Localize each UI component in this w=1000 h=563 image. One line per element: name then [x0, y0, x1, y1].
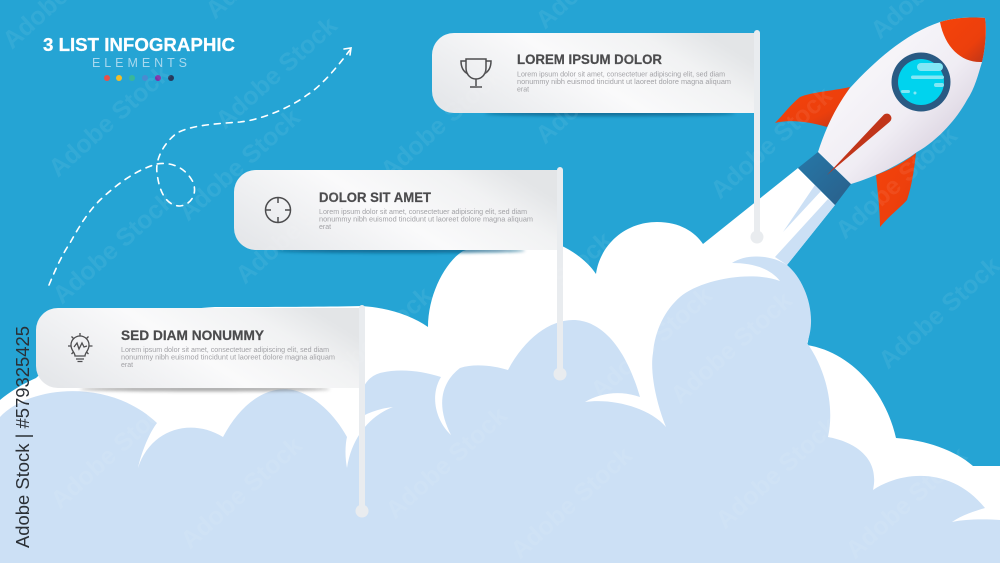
heading: SED DIAM NONUMMY	[121, 328, 264, 343]
light blue smoke cloud	[0, 256, 1000, 563]
body text: Lorem ipsum dolor sit amet, consectetuer adipiscing elit, sed diam	[517, 72, 725, 78]
watermark: Adobe Stock	[505, 441, 638, 563]
body text: erat	[517, 86, 529, 94]
body text: Lorem ipsum dolor sit amet, consectetuer adipiscing elit, sed diam	[121, 347, 329, 354]
panel: lorem ipsum dolor	[432, 33, 757, 116]
watermark: Adobe Stock	[230, 166, 363, 289]
white smoke cloud	[0, 168, 1000, 563]
body text	[319, 209, 533, 231]
body text: Lorem ipsum dolor sit amet, consectetuer adipiscing elit, sed diam	[319, 209, 527, 216]
watermark: Adobe Stock	[485, 226, 618, 349]
watermark: Adobe Stock	[305, 281, 438, 404]
watermark: Adobe Stock	[43, 59, 176, 182]
body text: erat	[121, 362, 133, 369]
watermark: Adobe Stock	[375, 61, 508, 184]
heading: DOLOR SIT AMET	[319, 190, 432, 205]
engine	[798, 152, 851, 205]
panel: sed diam nonummy	[36, 308, 362, 392]
watermark: Adobe Stock	[173, 103, 306, 226]
watermark: Adobe Stock	[830, 121, 963, 244]
icon: light bulb	[68, 333, 92, 362]
fuselage stripe	[827, 114, 891, 175]
watermark: Adobe Stock	[710, 411, 843, 534]
right fin	[876, 153, 916, 227]
watermark: Adobe Stock	[380, 401, 513, 524]
body text	[121, 347, 335, 369]
left fin	[775, 87, 850, 127]
title	[43, 35, 235, 70]
body text: nonummy nibh euismod tincidunt ut laoreet dolore magna aliquam	[517, 79, 731, 86]
watermark: Adobe Stock	[665, 286, 798, 409]
watermark: Adobe Stock	[210, 11, 343, 134]
stock id label: Adobe Stock | #579325425	[12, 326, 33, 548]
watermark: Adobe Stock	[840, 441, 973, 563]
flag pole 1	[750, 30, 764, 244]
watermark: Adobe Stock	[585, 281, 718, 404]
dashed flight path arrow	[49, 48, 351, 285]
watermark: Adobe Stock	[45, 391, 178, 514]
title: ELEMENTS	[92, 56, 187, 70]
body text: nonummy nibh euismod tincidunt ut laoreet dolore magna aliquam	[121, 354, 335, 362]
title: 3 LIST INFOGRAPHIC	[43, 35, 235, 55]
rocket exhaust streaks	[775, 185, 835, 265]
nose cone	[940, 17, 986, 62]
panel: dolor sit amet	[234, 170, 560, 253]
porthole	[892, 52, 950, 112]
colour dots	[104, 75, 174, 81]
flag pole 2	[554, 167, 566, 380]
body	[818, 17, 986, 184]
icon: trophy	[461, 59, 491, 87]
watermark: Adobe Stock	[175, 431, 308, 554]
watermark: Adobe Stock	[530, 26, 663, 149]
body text	[517, 72, 731, 94]
body text: nonummy nibh euismod tincidunt ut laoreet dolore magna aliquam	[319, 216, 533, 224]
watermark: Adobe Stock	[47, 186, 180, 309]
icon: crosshair	[265, 197, 291, 223]
flag pole 3	[356, 305, 368, 518]
heading: LOREM IPSUM DOLOR	[517, 52, 662, 67]
rocket	[775, 17, 986, 227]
watermark: Adobe Stock	[705, 81, 838, 204]
body text: erat	[319, 224, 331, 231]
